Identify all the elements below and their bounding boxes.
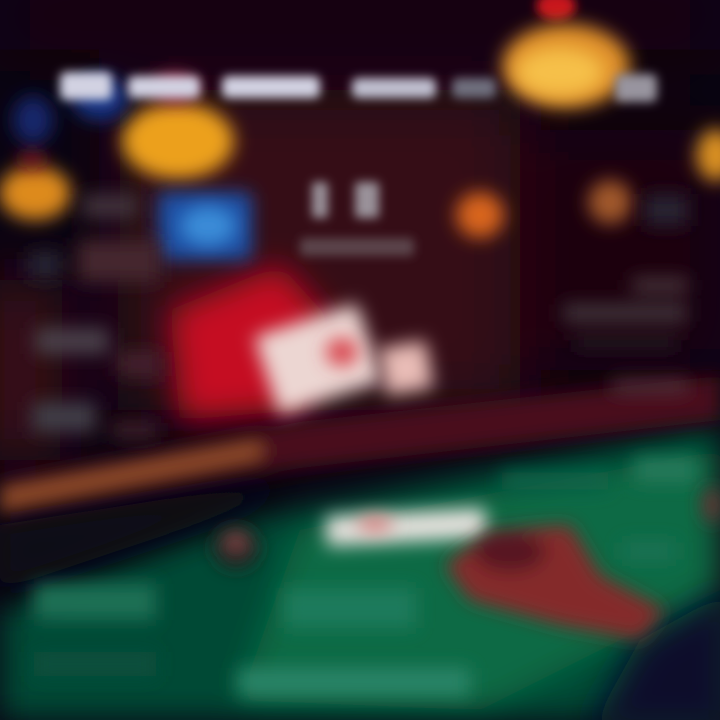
title [60, 72, 657, 102]
lamp: top right [502, 0, 630, 108]
right edge hand spot [703, 487, 720, 523]
lamp: far left [0, 148, 71, 220]
heading: centre number [300, 182, 414, 256]
hand [445, 525, 665, 640]
poker chip [214, 528, 258, 568]
lamp: upper left [122, 74, 234, 179]
lower dark band under rail [0, 478, 300, 590]
card pip [326, 338, 358, 366]
panel: green felt table [0, 425, 720, 720]
text block: left column [28, 194, 162, 438]
card on table [325, 508, 487, 546]
red glow behind cards [170, 265, 330, 420]
text block: felt labels [34, 458, 696, 696]
panel: maroon wall [0, 0, 720, 460]
lamp: dim right [588, 180, 632, 224]
sleeve [590, 590, 720, 720]
card: large [254, 303, 382, 415]
lamp: far right [696, 129, 720, 181]
icon: blue blobs top left [13, 76, 128, 144]
card: small [378, 340, 434, 396]
lamp: small centre right [456, 192, 504, 238]
table rail [0, 376, 720, 520]
text block: right column [563, 194, 688, 392]
cards on red [254, 303, 434, 415]
panel: blue box [158, 192, 252, 260]
